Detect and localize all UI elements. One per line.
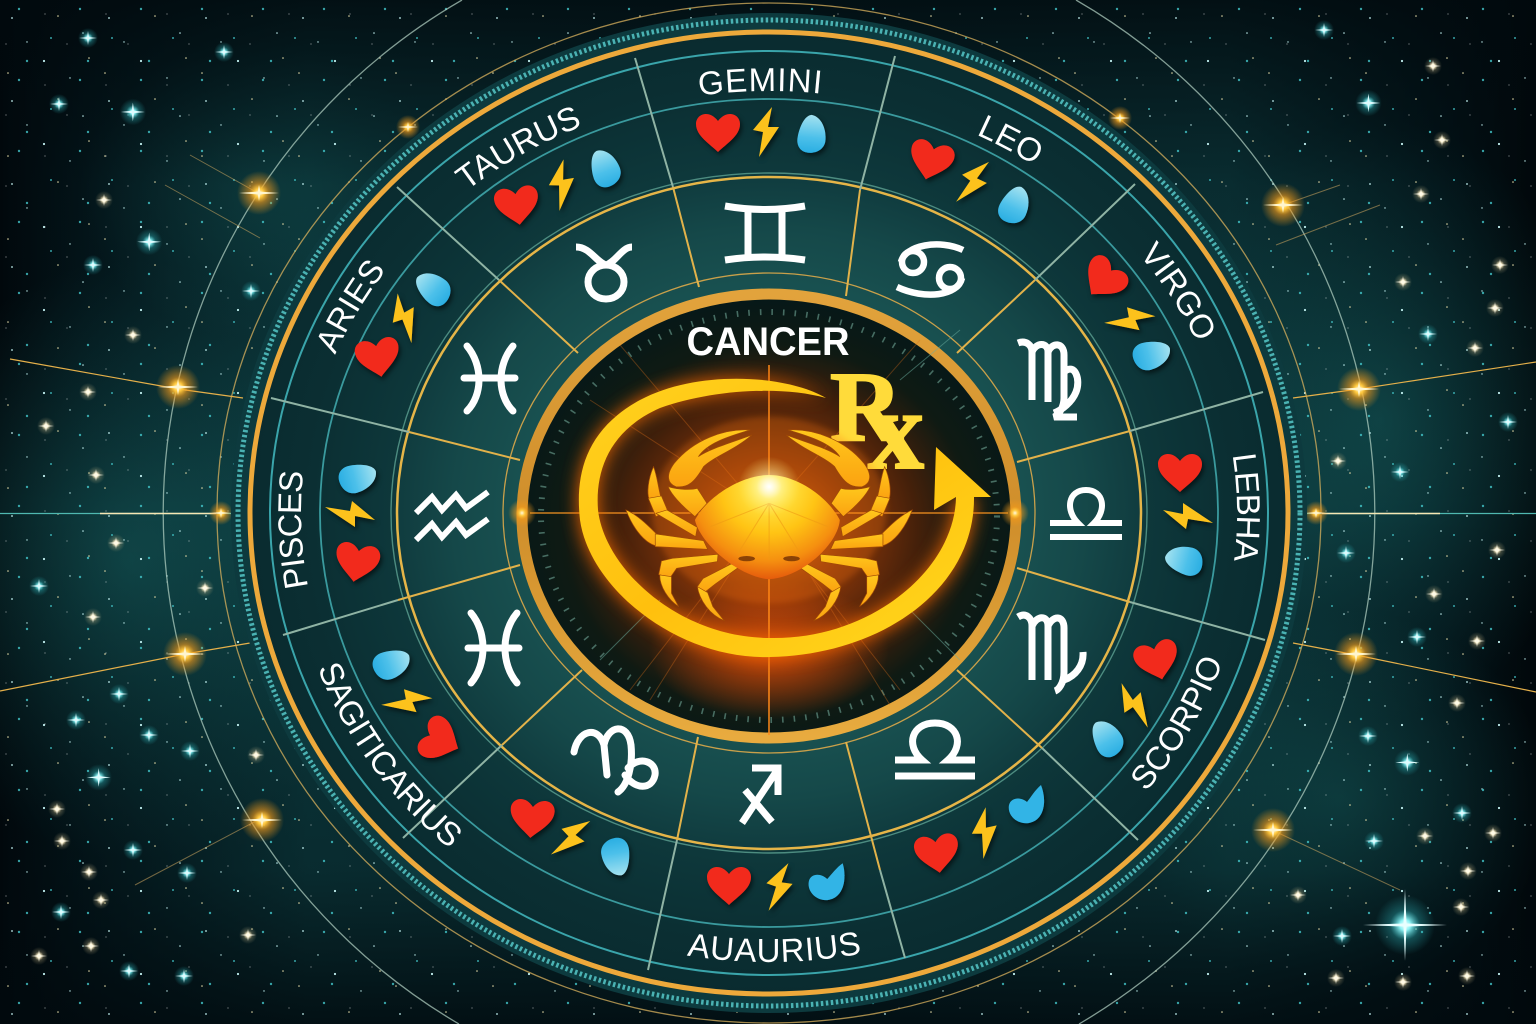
label: Taurus: TAURUS bbox=[454, 108, 580, 186]
retrograde Rx symbol: R bbox=[830, 351, 904, 462]
label: Virgo: VIRGO bbox=[1144, 240, 1214, 338]
retrograde Rx symbol bbox=[830, 351, 924, 493]
shell markings bbox=[710, 503, 828, 560]
label: Pisces: PISCES bbox=[278, 472, 308, 588]
glyph: Libra lower bbox=[895, 723, 975, 776]
sector labels bbox=[278, 68, 1260, 962]
glyph: Capricorn bbox=[574, 729, 655, 792]
glyph: Scorpio bbox=[1018, 615, 1083, 691]
wheel body bbox=[250, 32, 1288, 994]
label: Leo: LEO bbox=[978, 115, 1041, 161]
icons: Leo sector bbox=[905, 137, 1036, 228]
icons: Scorpio sector bbox=[1085, 637, 1183, 762]
retrograde Rx symbol: x bbox=[868, 369, 924, 493]
glyph: Libra right bbox=[1050, 490, 1122, 537]
icons: lower right sector bbox=[913, 785, 1044, 876]
glyph: Virgo bbox=[1018, 342, 1078, 417]
core sparkle bbox=[738, 457, 800, 517]
love, energy and mood icons bbox=[325, 107, 1213, 914]
retrograde swirl with arrow bbox=[579, 379, 991, 657]
icons: Virgo sector bbox=[1074, 251, 1174, 373]
icons: Gemini sector bbox=[696, 107, 828, 157]
label: Aries: ARIES bbox=[318, 260, 383, 355]
icons: Sagiticarius sector bbox=[369, 644, 467, 768]
label: Lebha: LEBHA bbox=[1233, 454, 1260, 561]
retrograde swirl glow bbox=[579, 379, 974, 657]
crab right limbs bbox=[786, 430, 912, 621]
medallion disc with gold ring bbox=[522, 294, 1016, 738]
icons: Aries sector bbox=[353, 265, 457, 381]
lower orange glow bbox=[649, 580, 889, 720]
icons: lower left sector bbox=[508, 798, 633, 878]
glyph: Aquarius bbox=[416, 492, 488, 540]
icons: Lebha sector bbox=[1158, 454, 1213, 579]
label: Sagiticarius: SAGITICARIUS bbox=[320, 664, 461, 846]
dotted teal ring bbox=[238, 20, 1300, 1006]
crab glow bbox=[652, 417, 886, 603]
glyph: Pisces lower bbox=[468, 613, 519, 683]
label: Scorpio: SCORPIO bbox=[1132, 658, 1220, 788]
glyph: Sagittarius bbox=[742, 768, 778, 823]
glyph: Gemini bbox=[725, 206, 805, 260]
light flares bbox=[508, 330, 1029, 735]
zodiac wheel bbox=[231, 13, 1307, 1013]
glyph: Cancer bbox=[897, 244, 963, 295]
label: Auaurius: AUAURIUS bbox=[686, 932, 860, 962]
label: Gemini: GEMINI bbox=[700, 68, 820, 94]
icons: Pisces sector bbox=[325, 459, 382, 586]
title: Cancer: CANCER bbox=[686, 320, 850, 364]
icons: Taurus sector bbox=[493, 145, 625, 228]
wheel outer dark band bbox=[231, 13, 1307, 1013]
crab left limbs bbox=[626, 430, 752, 621]
sign band bbox=[397, 177, 1141, 849]
crab shell bbox=[695, 475, 840, 579]
crab bbox=[626, 417, 912, 621]
crab eyes bbox=[738, 556, 800, 561]
central medallion bbox=[508, 294, 1029, 738]
sector dividers bbox=[271, 56, 1265, 970]
glyph: Taurus bbox=[576, 247, 632, 299]
icons: Auaurius sector bbox=[707, 860, 846, 914]
glyph: Pisces upper bbox=[464, 346, 515, 411]
dial ticks bbox=[541, 312, 997, 720]
sign glyphs ring bbox=[416, 206, 1122, 823]
